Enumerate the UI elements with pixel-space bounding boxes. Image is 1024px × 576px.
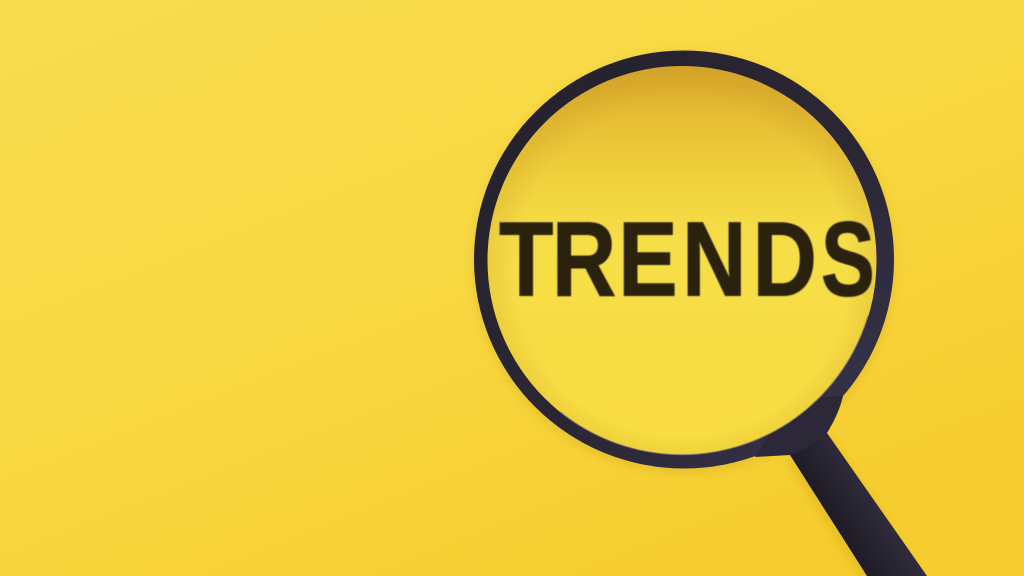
word: TRENDS: TREND [499,199,817,318]
word: TRENDS: S [821,200,875,318]
lens [488,66,876,455]
magnifier handle [790,433,927,576]
shadow under magnifying glass [473,53,925,576]
magnifier ring and lug [474,50,894,468]
rim highlight [560,316,868,455]
